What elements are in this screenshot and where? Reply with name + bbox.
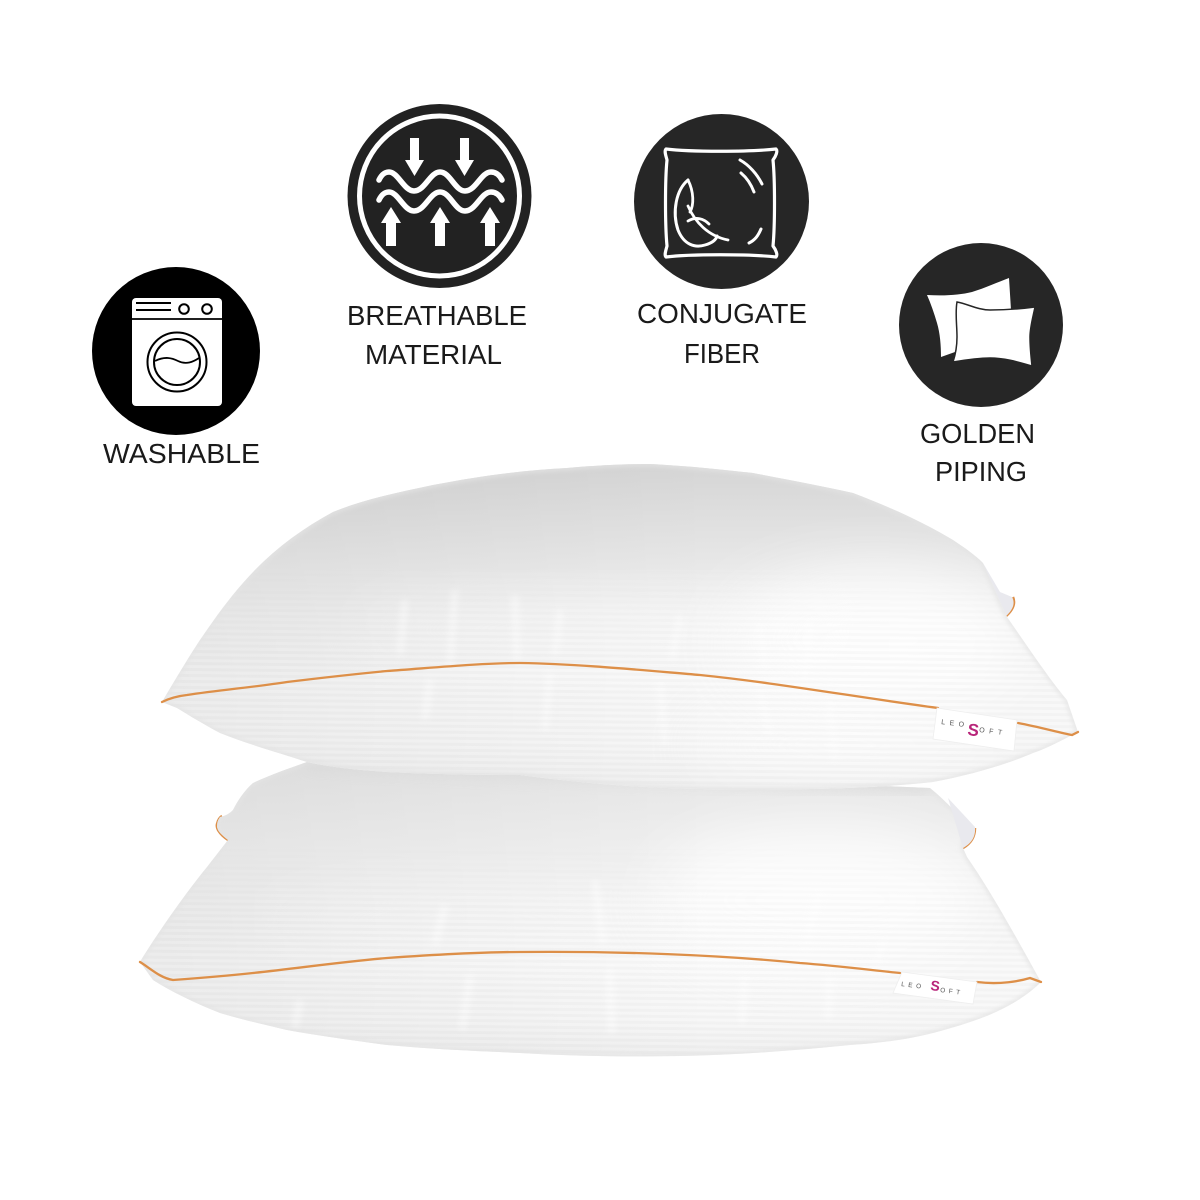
flap: bottom pillow right (948, 798, 975, 848)
piping: bottom pillow front (140, 952, 1041, 983)
bottom pillow (130, 750, 1060, 1065)
label: golden piping: GOLDEN (920, 418, 1035, 449)
label tag: bottom pillow (893, 972, 977, 1004)
icon: breathable material (348, 104, 532, 288)
top pillow (150, 455, 1090, 800)
piping: top pillow front (162, 663, 1078, 735)
label tag: bottom pillow: OFT (940, 987, 964, 997)
icon: golden piping (899, 243, 1063, 407)
piping: bottom pillow back corners (217, 816, 975, 848)
label tag: bottom pillow: S (930, 977, 941, 994)
label: breathable material: BREATHABLE (347, 300, 527, 331)
flap: top pillow right (983, 563, 1014, 617)
label tag: top pillow: S (967, 720, 980, 740)
label tag: top pillow (933, 708, 1017, 751)
label tag: bottom pillow: LEO (901, 981, 925, 991)
label: washable: WASHABLE (103, 438, 260, 469)
label: conjugate fiber: FIBER (684, 338, 760, 369)
label: conjugate fiber: CONJUGATE (637, 298, 807, 329)
label tag: top pillow: OFT (979, 727, 1007, 737)
label: breathable material: MATERIAL (365, 339, 502, 370)
icon: conjugate fiber (634, 114, 809, 289)
pillow body: bottom (130, 750, 1060, 1065)
label: golden piping: PIPING (935, 456, 1027, 487)
pillow body: top (150, 455, 1090, 800)
piping: top pillow back corner (1005, 597, 1014, 617)
icon: washable (92, 267, 260, 435)
label tag: top pillow: LEO (941, 719, 969, 729)
